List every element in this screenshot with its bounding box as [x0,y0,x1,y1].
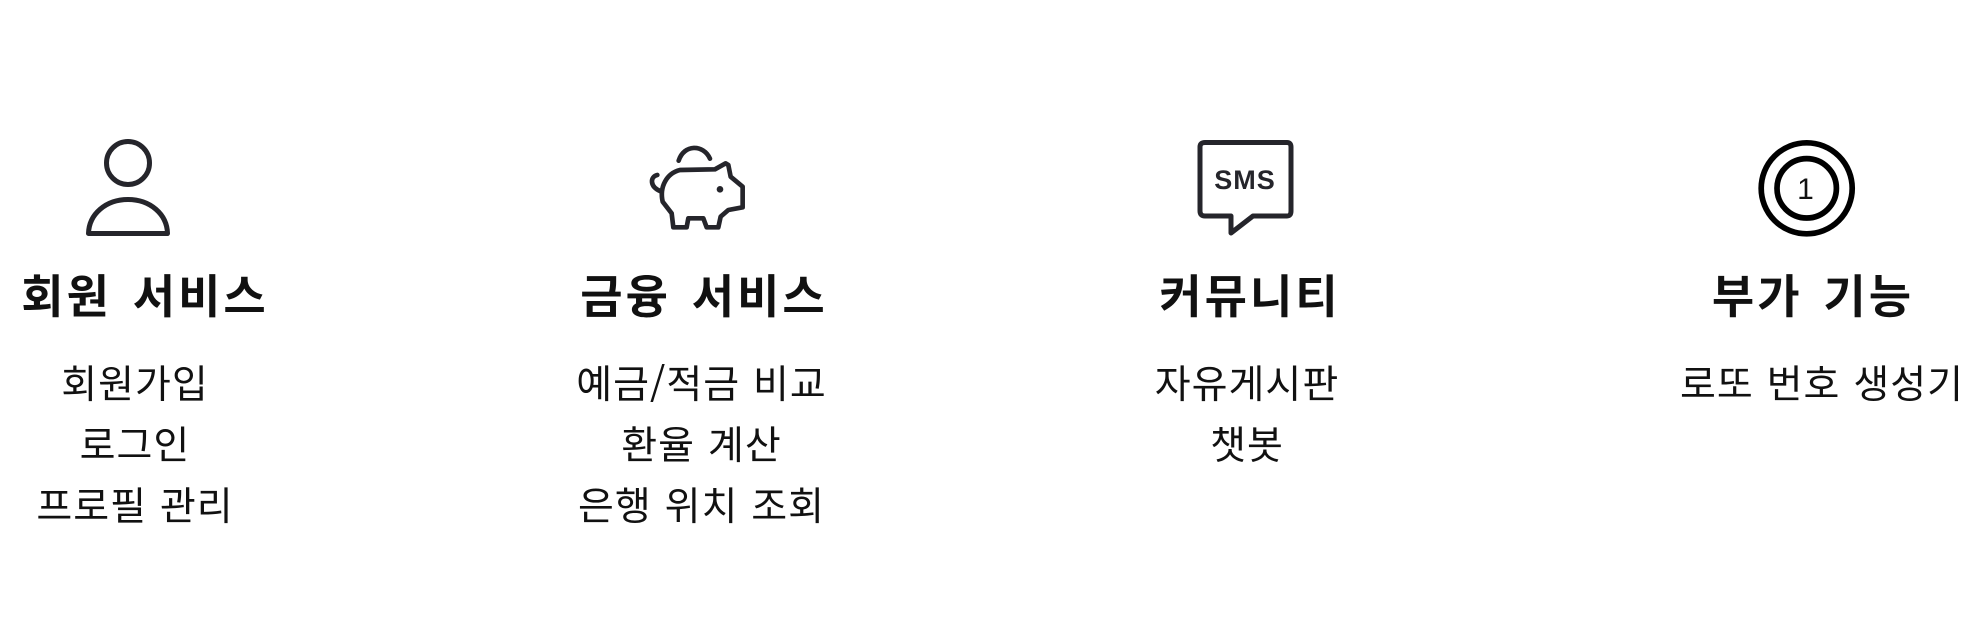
icon: piggy bank [650,146,745,230]
text: deposit and savings comparison: 예금/적금 비교 [576,354,827,410]
text: sign up: 회원가입 [61,354,209,410]
text: free board: 자유게시판 [1155,354,1339,410]
text: bank location lookup: 은행 위치 조회 [578,476,825,532]
icon: SMS speech bubble [1198,140,1294,236]
icon: lottery ball number one: 1 [1797,173,1814,206]
heading: member services: 회원 서비스 [21,261,269,327]
panel: community [1155,140,1341,471]
text: exchange rate calculation: 환율 계산 [621,415,782,471]
panel: financial services [576,146,828,532]
heading: financial services: 금융 서비스 [580,261,828,327]
icon: person [86,139,170,236]
text: chatbot: 챗봇 [1210,415,1284,471]
panel: extra features [1680,140,1964,410]
heading: extra features: 부가 기능 [1712,261,1914,327]
text: profile management: 프로필 관리 [36,476,234,532]
icon: lottery ball number one [1758,140,1856,237]
icon: SMS speech bubble: SMS [1214,165,1276,195]
text: login: 로그인 [80,415,190,471]
panel: member services [21,139,269,532]
text: lotto number generator: 로또 번호 생성기 [1680,354,1964,410]
heading: community: 커뮤니티 [1159,261,1341,327]
